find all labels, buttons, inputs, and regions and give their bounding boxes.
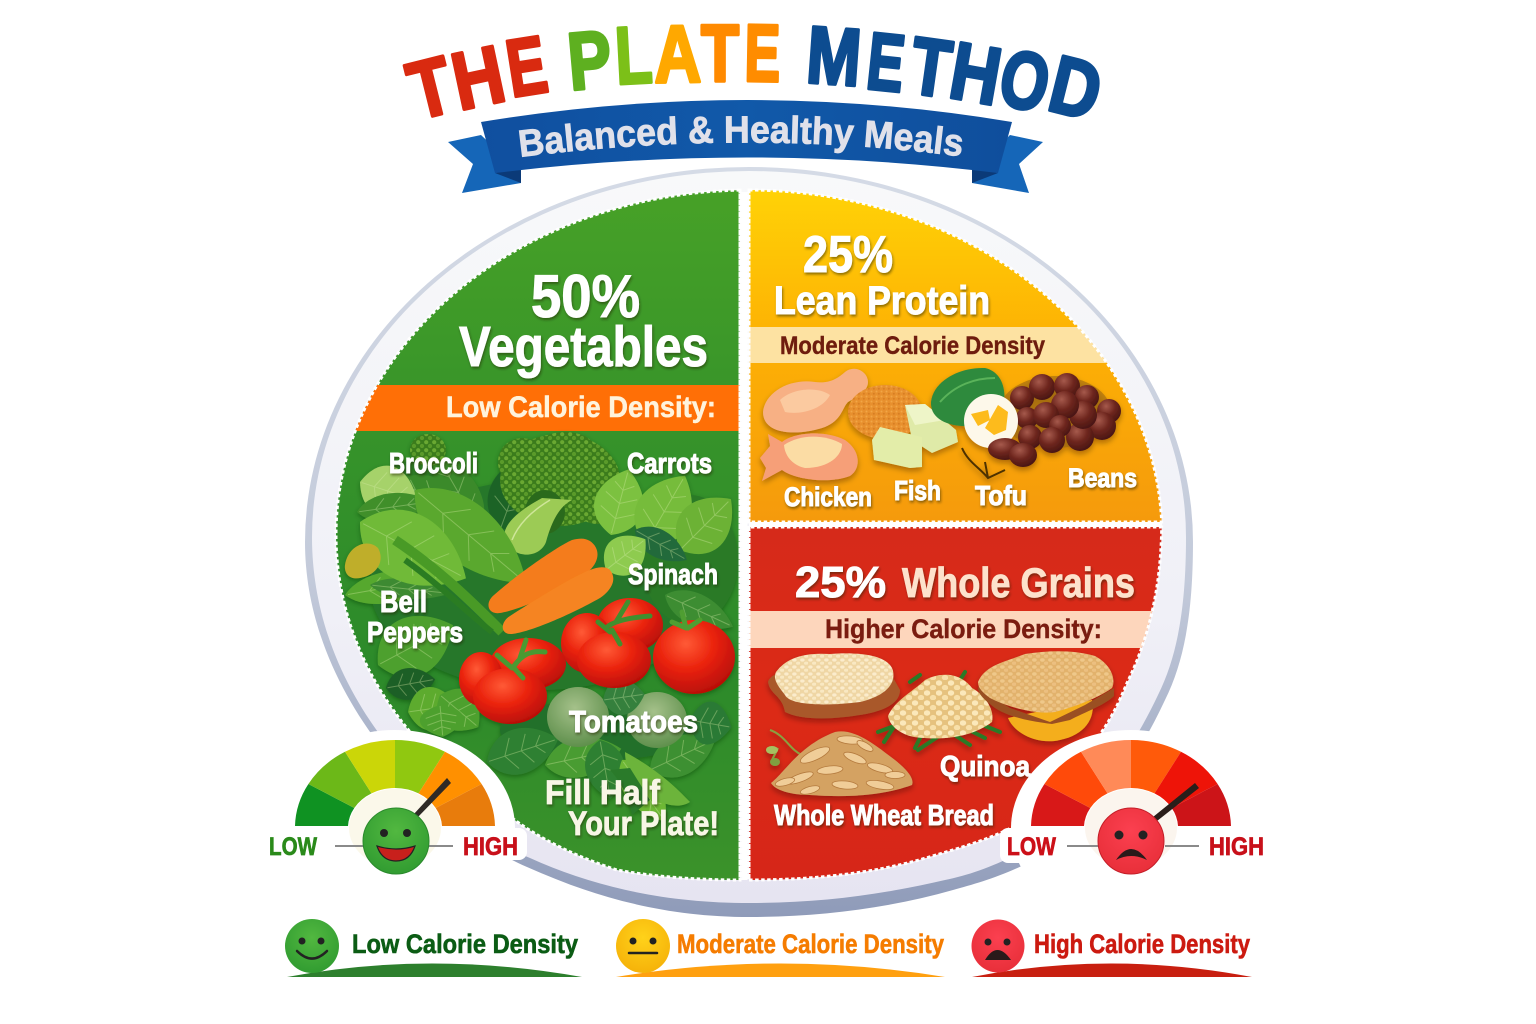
title: the plate method: L (613, 9, 654, 102)
corn (1008, 700, 1093, 741)
title: the plate method (399, 8, 1111, 138)
panel: vegetables (336, 190, 749, 880)
tofu (905, 404, 958, 453)
calorie band: higher (749, 611, 1164, 648)
gauge: high calorie (1000, 730, 1266, 926)
needle (413, 778, 451, 818)
grain labels (774, 751, 1031, 832)
slogan: fill half your plate: Fill Half (545, 774, 661, 812)
rice bowl (768, 670, 900, 718)
banner: balanced & healthy meals (448, 100, 1043, 193)
vegetable labels: Peppers (367, 617, 463, 649)
protein labels: Tofu (975, 480, 1027, 511)
beans (988, 373, 1121, 467)
high label: HIGH (463, 833, 518, 861)
wheat pile (771, 731, 913, 796)
sprouts (547, 687, 609, 747)
leaves (358, 466, 415, 504)
quinoa leaves (878, 672, 1000, 750)
vegetable labels: Tomatoes (569, 704, 698, 739)
herb sprig (962, 448, 1005, 478)
plate (305, 167, 1193, 917)
beans behind egg (1010, 386, 1038, 429)
title: the plate method: T (905, 20, 957, 115)
heading: 25% lean protein (774, 226, 990, 323)
plate rim (305, 167, 1193, 917)
bread (978, 687, 1114, 724)
grain labels: Whole Wheat Bread (774, 800, 994, 832)
heading: 50% vegetables (459, 263, 708, 379)
slogan: fill half your plate: Your Plate! (568, 805, 719, 843)
panel: lean protein (749, 190, 1162, 522)
title: the plate method: T (399, 39, 461, 137)
legend: high calorie density (972, 920, 1252, 977)
ribbon tail right (972, 135, 1043, 193)
title: the plate method: E (863, 15, 909, 109)
low label: LOW (269, 833, 317, 861)
vegetable labels: Carrots (627, 448, 712, 480)
title: the plate method: H (944, 24, 1008, 122)
heading: 25% whole grains: Whole Grains (902, 559, 1135, 606)
text: higher calorie density: Higher Calorie Density: (825, 614, 1102, 644)
carrots (488, 539, 598, 613)
fish (760, 433, 858, 481)
title: the plate method: E (500, 18, 553, 114)
panel: whole grains (749, 527, 1164, 880)
legend: moderate calorie density (616, 919, 945, 977)
grain labels: Quinoa (940, 751, 1031, 783)
legend: moderate calorie density: Moderate Calorie Density (677, 929, 944, 959)
title: the plate method: T (701, 9, 739, 99)
text: low calorie density: Low Calorie Density: (446, 391, 716, 424)
calorie band: low (340, 385, 740, 431)
title: the plate method: H (444, 30, 512, 128)
chicken drumstick (763, 369, 868, 433)
grains illustration (766, 651, 1114, 796)
protein labels: Beans (1068, 463, 1137, 493)
heading: 50% vegetables: 50% (531, 263, 640, 330)
sad face (1098, 808, 1164, 874)
broccoli (500, 434, 620, 526)
title: the plate method: D (1041, 38, 1111, 138)
subtitle: Balanced & Healthy Meals (518, 115, 962, 158)
heading: 25% whole grains: 25% (795, 558, 886, 607)
vegetable labels: Broccoli (389, 448, 478, 480)
heading: 50% vegetables: Vegetables (459, 315, 708, 379)
smiley face (363, 808, 429, 874)
vegetable illustration (342, 432, 749, 832)
slogan: fill half your plate (545, 774, 719, 843)
legend: high calorie density: High Calorie Density (1034, 929, 1250, 959)
gauge: low calorie (269, 730, 527, 926)
protein illustration (760, 368, 1121, 481)
patty (848, 385, 922, 439)
bean shadow (999, 376, 1111, 448)
leaf near slogan (625, 752, 690, 806)
protein labels (784, 463, 1137, 512)
vegetable labels (367, 448, 718, 739)
title: the plate method: A (653, 9, 702, 100)
needle (1153, 783, 1199, 821)
title: the plate method: E (744, 8, 781, 99)
protein labels: Fish (894, 475, 941, 506)
low label: LOW (1007, 833, 1056, 861)
avocado (931, 368, 1004, 426)
title: the plate method: M (804, 9, 864, 104)
ribbon tail left (448, 135, 521, 193)
legend: low calorie density: Low Calorie Density (352, 929, 578, 959)
heading: 25% lean protein: Lean Protein (774, 279, 990, 323)
protein labels: Chicken (784, 482, 872, 512)
title: the plate method: P (564, 14, 615, 107)
text: moderate calorie density: Moderate Calorie Density (780, 332, 1045, 360)
heading: 25% lean protein: 25% (803, 226, 893, 284)
calorie band: moderate (749, 327, 1129, 363)
legend: low calorie density (285, 919, 582, 977)
high label: HIGH (1209, 833, 1264, 861)
egg (964, 394, 1018, 448)
heading: 25% whole grains (795, 558, 1135, 607)
herb sprig (770, 730, 802, 760)
quinoa pile (888, 675, 993, 738)
title: the plate method: O (992, 33, 1057, 131)
tomatoes (597, 598, 663, 652)
bottom leaves (486, 728, 558, 778)
vegetable labels: Bell (380, 584, 427, 619)
bell pepper (345, 543, 381, 578)
vegetable labels: Spinach (628, 559, 718, 591)
